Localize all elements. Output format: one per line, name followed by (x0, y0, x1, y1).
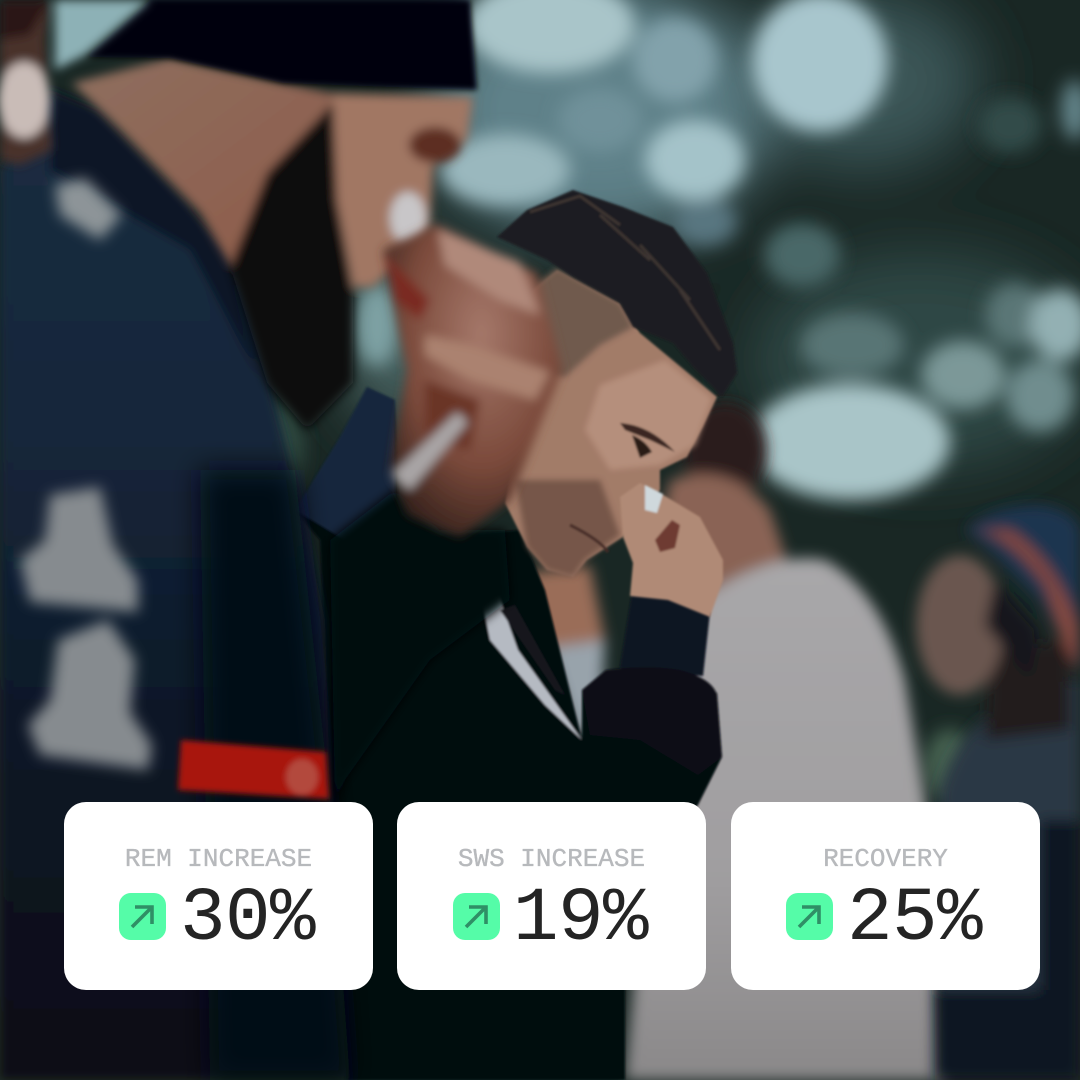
stat card: SWS increase (397, 802, 706, 990)
stat card: REM increase (64, 802, 373, 990)
far left blurred figure (0, 0, 150, 165)
value: 25%: 25% (847, 876, 982, 962)
centre athlete hair (497, 190, 737, 397)
foreground athlete arm and sleeve (330, 490, 510, 810)
stat card: recovery (731, 802, 1040, 990)
value: 30%: 30% (180, 876, 315, 962)
icon: up-right arrow (119, 893, 166, 940)
label: REM increase: REM INCREASE (125, 844, 312, 874)
centre athlete neck and face (505, 268, 717, 577)
foreground athlete (0, 0, 562, 1080)
centre athlete hand with nasal strip (620, 483, 723, 617)
background foliage and bokeh (256, 0, 1080, 801)
background person in grey shirt (505, 402, 945, 1080)
icon: up-right arrow (786, 893, 833, 940)
value: 19%: 19% (513, 876, 648, 962)
foreground athlete sleeve badges (20, 178, 152, 770)
foreground athlete inner shadow (200, 470, 350, 1080)
centre athlete jacket (295, 387, 722, 1080)
background person on right with cap (916, 505, 1080, 1080)
foreground athlete red armband (178, 740, 329, 799)
foreground athlete beanie (85, 0, 477, 90)
centre athlete (295, 190, 737, 1080)
icon: up-right arrow (453, 893, 500, 940)
foreground athlete hand (383, 224, 562, 537)
label: recovery: RECOVERY (823, 844, 948, 874)
foreground athlete neck and face (72, 58, 473, 430)
foreground athlete jacket (0, 90, 350, 1080)
label: SWS increase: SWS INCREASE (458, 844, 645, 874)
